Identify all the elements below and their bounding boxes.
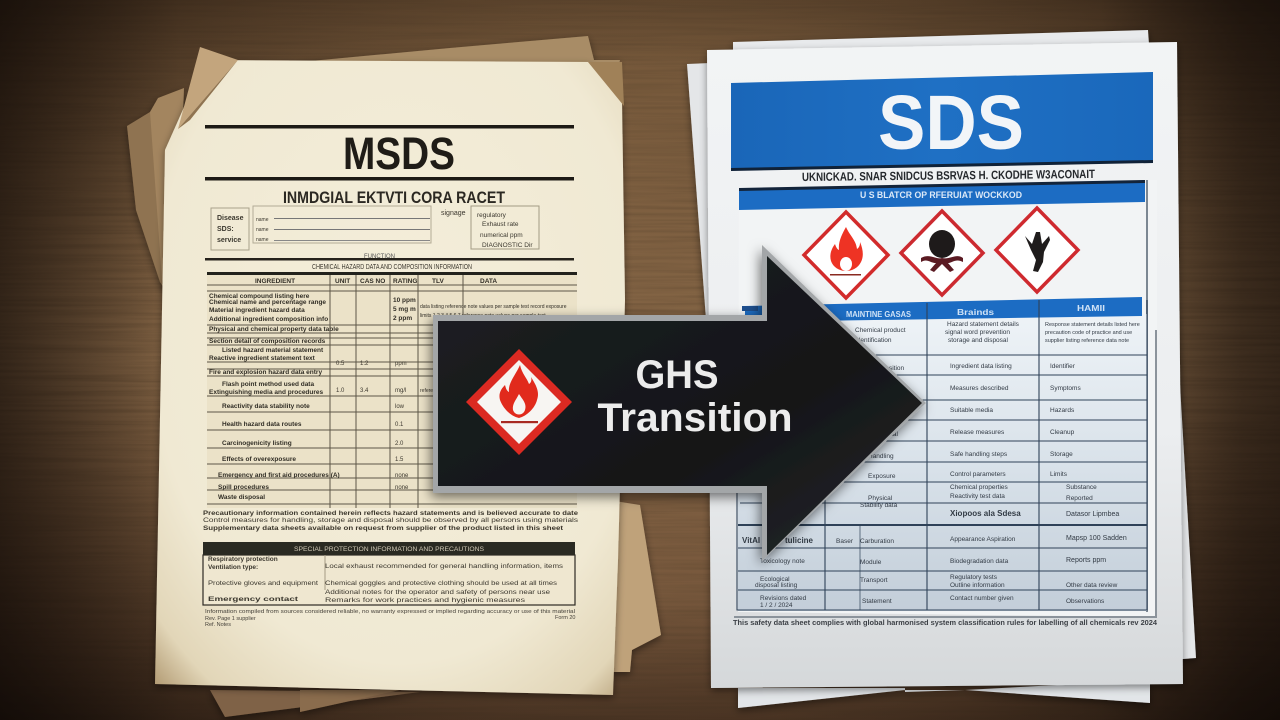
identification form boxes: signage — [441, 210, 466, 217]
MSDS data table: Material ingredient hazard data — [209, 307, 305, 314]
MSDS data table: data listing reference note values per sample test record exposure — [420, 304, 567, 310]
MSDS data table: 2 ppm — [393, 315, 412, 322]
SDS data table: Handling — [868, 453, 894, 460]
SDS data table: Revisions dated — [760, 595, 807, 602]
SDS inner panel — [734, 180, 1157, 617]
MSDS data table: low — [395, 404, 405, 410]
SDS data table: tulicine — [785, 536, 814, 545]
MSDS data table: Flash point method used data — [222, 381, 314, 388]
SDS data table: Safe handling steps — [950, 451, 1008, 458]
MSDS data table: Additional ingredient composition info — [209, 316, 328, 323]
identification form boxes: name — [256, 227, 269, 233]
MSDS data table: none — [395, 473, 409, 479]
MSDS footnote paragraph: Precautionary information contained herein reflects hazard statements and is believed accurate to date — [203, 510, 578, 517]
SDS data table: storage and disposal — [948, 337, 1009, 344]
MSDS data table: Waste disposal — [218, 494, 265, 501]
MSDS data table: 1.5 — [395, 457, 404, 463]
MSDS data table: 1.0 — [336, 388, 345, 394]
SDS data table: Response statement details listed here — [1045, 322, 1140, 328]
MSDS data table: 10 ppm — [393, 297, 416, 304]
SDS data table: Hazards — [1050, 407, 1075, 414]
SDS data table: Biodegradation data — [950, 558, 1009, 565]
MSDS data table: Emergency and first aid procedures (A) — [218, 472, 340, 479]
identification form boxes: Exhaust rate — [482, 221, 519, 228]
arrow label: GHS — [636, 353, 718, 397]
SDS data table: Identification — [855, 337, 892, 344]
SDS footer line: This safety data sheet complies with global harmonised system classification rules for labelling of all chemicals rev 2024 — [733, 618, 1158, 627]
MSDS data table: Physical and chemical property data table — [209, 326, 339, 333]
MSDS data table: RATING — [393, 278, 417, 285]
back sheets of aged paper — [127, 36, 661, 717]
table header row: Brainds — [957, 308, 995, 317]
SDS data table: disposal listing — [755, 582, 798, 589]
SDS data table — [737, 297, 1147, 611]
icon: health hazard pictogram — [996, 208, 1078, 292]
identification form boxes: service — [217, 237, 241, 244]
SDS data table: Composition — [868, 365, 905, 372]
SDS data table: Chemical properties — [950, 484, 1009, 491]
SDS data table: Limits — [1050, 471, 1068, 478]
MSDS data table: Chemical name and percentage range — [209, 299, 326, 306]
SDS data table: Reports ppm — [1066, 557, 1106, 564]
SDS data table: Measures described — [950, 385, 1009, 392]
SDS data table: Reported — [1066, 495, 1093, 502]
MSDS sheet footer: Ref. Notes — [205, 622, 231, 628]
MSDS footnote paragraph — [203, 510, 579, 532]
MSDS data table: Extinguishing media and procedures — [209, 389, 324, 396]
SDS data table: Exposure — [868, 473, 896, 480]
MSDS data table: Listed hazard material statement — [222, 347, 324, 354]
MSDS data table: Section detail of composition records — [209, 338, 326, 345]
MSDS lower section box: Emergency contact — [208, 596, 299, 603]
blue identification band — [739, 180, 1145, 210]
MSDS lower section box: Protective gloves and equipment — [208, 580, 318, 587]
MSDS lower section box: SPECIAL PROTECTION INFORMATION AND PRECAUTIONS — [294, 547, 484, 553]
SDS data table: Reactivity test data — [950, 493, 1005, 500]
MSDS data table: Health hazard data routes — [222, 421, 302, 428]
MSDS lower section box — [203, 542, 575, 605]
MSDS data table: Effects of overexposure — [222, 456, 296, 463]
icon: flammable pictogram — [804, 212, 888, 298]
table header row: MAINTINE GASAS — [846, 310, 912, 319]
SDS data table: Toxicology note — [760, 558, 805, 565]
icon: toxic skull pictogram — [901, 211, 983, 295]
MSDS data table: ppm — [395, 361, 407, 367]
SDS data table: Carburation — [860, 538, 894, 545]
SDS data table: Physical — [868, 495, 893, 502]
identification form boxes — [211, 206, 539, 250]
MSDS data table: 5 mg m — [393, 306, 416, 313]
SDS data table: Accidental — [868, 431, 899, 438]
SDS data table: Suitable media — [950, 407, 993, 414]
MSDS data table: 3.4 — [360, 388, 369, 394]
MSDS sheet footer — [205, 609, 575, 628]
SDS data table: VitAl — [742, 536, 760, 545]
SDS data table: Statement — [862, 598, 892, 605]
SDS data table: Baser — [836, 538, 854, 545]
SDS data table: signal word prevention — [945, 329, 1010, 336]
MSDS data table: CAS NO — [360, 278, 385, 285]
identification form boxes: name — [256, 237, 269, 243]
SDS blue header: SDS — [878, 80, 1024, 166]
MSDS data table: INGREDIENT — [255, 278, 295, 285]
blue identification band: U S BLATCR OP RFERUIAT WOCKKOD — [860, 190, 1022, 200]
MSDS lower section box: Respiratory protection — [208, 556, 278, 563]
table header row: HAMII — [1077, 304, 1105, 313]
MSDS data table: Reactivity data stability note — [222, 403, 310, 410]
main SDS sheet — [707, 42, 1183, 688]
SDS data table: Chemical product — [855, 327, 906, 334]
MSDS data table: Carcinogenicity listing — [222, 440, 292, 447]
SDS data table: Contact number given — [950, 595, 1014, 602]
SDS data table: Storage — [1050, 451, 1073, 458]
SDS data table: Datasor Lipmbea — [1066, 511, 1119, 518]
SDS data table: Transport — [860, 577, 888, 584]
MSDS data table: 0.5 — [336, 361, 345, 367]
MSDS data table: reference note values listed here — [420, 388, 493, 394]
SDS data table: precaution code of practice and use — [1045, 330, 1132, 336]
SDS subtitle: UKNICKAD. SNAR SNIDCUS BSRVAS H. CKODHE W3ACONAIT — [802, 167, 1096, 184]
SDS data table: Hazard statement details — [947, 321, 1020, 328]
SDS data table: Firefighting — [868, 409, 901, 416]
MSDS data table: Fire and explosion hazard data entry — [209, 369, 322, 376]
icon: flame diamond — [466, 349, 572, 455]
MSDS data table: DATA — [480, 278, 497, 285]
MSDS data table: 2.0 — [395, 441, 404, 447]
SDS data table: Control parameters — [950, 471, 1006, 478]
MSDS data table: 0.1 — [395, 422, 404, 428]
section rule and caption — [205, 254, 574, 271]
identification form boxes: Disease — [217, 215, 244, 222]
SDS blue header — [731, 72, 1153, 171]
SDS data table: Module — [860, 559, 882, 566]
MSDS data table: Spill procedures — [218, 484, 269, 491]
SDS data table: Other data review — [1066, 582, 1118, 589]
SDS data table: Outline information — [950, 582, 1005, 589]
MSDS data table: none — [395, 485, 409, 491]
MSDS data table: Reactive ingredient statement text — [209, 355, 316, 362]
SDS data table: Appearance Aspiration — [950, 536, 1016, 543]
MSDS title with rules: MSDS — [343, 128, 455, 179]
MSDS lower section box: Local exhaust recommended for general handling information, items — [325, 563, 564, 570]
MSDS data table: 1.2 — [360, 361, 369, 367]
MSDS data table: TLV — [432, 278, 444, 285]
SDS data table: Stability data — [860, 502, 898, 509]
arrow: GHS Transition — [433, 245, 926, 561]
arrow label: Transition — [598, 396, 792, 440]
SDS data table: 1 / 2 / 2024 — [760, 602, 793, 609]
folded corners — [178, 47, 624, 129]
SDS data table: Regulatory tests — [950, 574, 998, 581]
SDS data table: Observations — [1066, 598, 1105, 605]
MSDS lower section box: Additional notes for the operator and safety of persons near use — [325, 589, 550, 596]
MSDS sheet footer: Form 20 — [555, 615, 575, 621]
SDS data table: Mapsp 100 Sadden — [1066, 535, 1127, 542]
identification form boxes: SDS: — [217, 226, 234, 233]
SDS data table: Xiopoos ala Sdesa — [950, 509, 1021, 518]
MSDS footnote paragraph: Supplementary data sheets available on request from supplier of the product listed in this sheet — [203, 525, 564, 532]
SDS data table: Release measures — [950, 429, 1005, 436]
SDS data table: Symptoms — [1050, 385, 1081, 392]
MSDS sheet footer: Rev. Page 1 supplier — [205, 616, 256, 622]
MSDS data table — [207, 272, 577, 508]
MSDS title with rules — [205, 125, 574, 180]
arrow label — [598, 353, 792, 440]
back white sheets — [687, 30, 1196, 708]
main MSDS sheet — [155, 60, 625, 695]
MSDS lower section box: Ventilation type: — [208, 564, 258, 571]
table header row — [742, 297, 1142, 322]
SDS data table: Ecological — [760, 576, 790, 583]
MSDS data table: UNIT — [335, 278, 350, 285]
MSDS lower section box: Chemical goggles and protective clothing should be used at all times — [325, 580, 558, 587]
SDS data table: Substance — [1066, 484, 1097, 491]
MSDS data table: Chemical compound listing here — [209, 293, 310, 300]
MSDS lower section box: Remarks for work practices and hygienic measures — [325, 597, 526, 604]
SDS data table: Cleanup — [1050, 429, 1075, 436]
panel: new SDS document stack — [687, 30, 1196, 708]
arrow body — [433, 245, 926, 561]
identification form boxes: regulatory — [477, 212, 507, 219]
MSDS data table: limits 1 2 3 4 5 6 7 reference note values per sample test — [420, 313, 546, 319]
SDS data table: Ingredient data listing — [950, 363, 1012, 370]
identification form boxes: numerical ppm — [480, 232, 523, 239]
panel: old MSDS document stack — [127, 36, 661, 717]
SDS data table: Identifier — [1050, 363, 1076, 370]
section rule and caption: CHEMICAL HAZARD DATA AND COMPOSITION INFORMATION — [312, 264, 472, 271]
MSDS sheet footer: Information compiled from sources considered reliable, no warranty expressed or implied regarding accuracy or use of this material — [205, 609, 575, 615]
section rule and caption: FUNCTION — [364, 254, 395, 260]
identification form boxes: DIAGNOSTIC Dir — [482, 242, 533, 249]
MSDS data table: mg/l — [395, 388, 406, 394]
SDS data table: First aid — [868, 387, 892, 394]
SDS data table: supplier listing reference data note — [1045, 338, 1129, 344]
MSDS subtitle: INMDGIAL EKTVTI CORA RACET — [283, 188, 506, 207]
identification form boxes: name — [256, 217, 269, 223]
MSDS footnote paragraph: Control measures for handling, storage and disposal should be observed by all persons using materials — [203, 517, 579, 524]
